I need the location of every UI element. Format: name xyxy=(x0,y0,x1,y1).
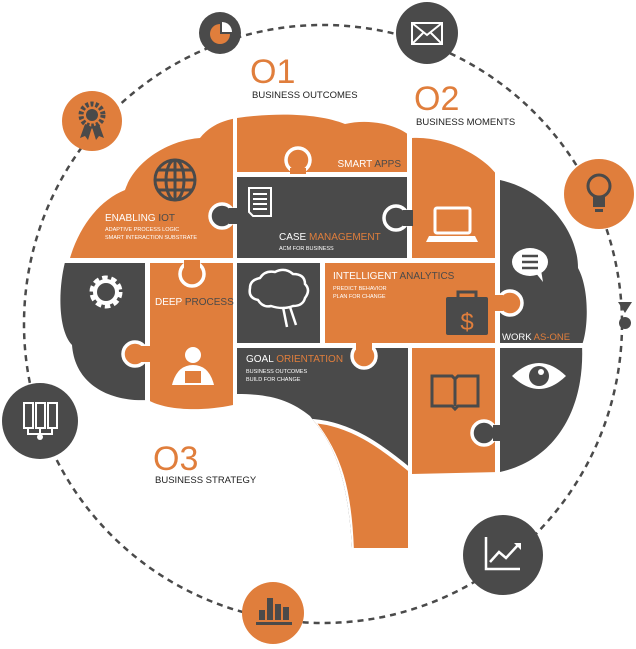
panel: smart apps xyxy=(237,114,407,172)
icon: eye xyxy=(512,363,566,389)
panel: eye xyxy=(500,348,582,472)
heading: 01: BUSINESS OUTCOMES xyxy=(252,90,358,101)
text: intelligent analytics: INTELLIGENT ANALYTICS xyxy=(333,271,455,282)
arrow marker xyxy=(618,302,632,329)
icon: document xyxy=(249,188,271,216)
icon: brain outline xyxy=(250,270,308,327)
icon: pie chart xyxy=(199,12,241,54)
text: goal orientation: BUILD FOR CHANGE xyxy=(246,377,301,383)
icon: gear xyxy=(93,279,119,305)
text: case management: ACM FOR BUSINESS xyxy=(279,246,334,252)
text: intelligent analytics: PLAN FOR CHANGE xyxy=(333,294,386,300)
icon: book xyxy=(432,376,478,409)
panel: book xyxy=(412,348,495,474)
puzzle knobs xyxy=(123,148,522,445)
text: enabling iot: SMART INTERACTION SUBSTRATE xyxy=(105,235,197,241)
text: enabling iot xyxy=(105,213,197,241)
brain xyxy=(60,114,587,548)
icon: light bulb xyxy=(564,159,634,229)
text: deep process: DEEP PROCESS xyxy=(155,297,234,308)
text: goal orientation: GOAL ORIENTATION xyxy=(246,354,343,365)
text: goal orientation: BUSINESS OUTCOMES xyxy=(246,369,307,375)
icon: laptop xyxy=(426,208,478,242)
text: case management: CASE MANAGEMENT xyxy=(279,232,381,243)
heading: 02: O2 xyxy=(414,80,459,118)
text: work as-one: WORK AS-ONE xyxy=(502,332,570,343)
heading: 03 xyxy=(153,440,257,486)
heading: 03: BUSINESS STRATEGY xyxy=(155,475,257,486)
heading: 01 xyxy=(250,53,358,101)
text: goal orientation xyxy=(246,354,343,383)
icon: globe xyxy=(155,160,195,200)
text: smart apps: SMART APPS xyxy=(337,159,401,170)
text: enabling iot: ENABLING IOT xyxy=(105,213,175,224)
icon: reading person xyxy=(172,347,214,385)
panel: work as-one xyxy=(500,180,587,343)
icon: folders xyxy=(2,383,78,459)
text: intelligent analytics xyxy=(333,271,455,300)
panel: goal orientation xyxy=(237,348,408,548)
panel: laptop xyxy=(412,138,495,258)
panel: brain icon xyxy=(237,263,320,343)
panel: enabling iot xyxy=(70,118,233,258)
text: intelligent analytics: PREDICT BEHAVIOR xyxy=(333,286,387,292)
stem xyxy=(313,421,410,552)
icon: briefcase xyxy=(446,292,488,336)
icon: briefcase: $ xyxy=(460,309,474,336)
panel: gear xyxy=(60,263,145,400)
panel: case management xyxy=(237,177,407,258)
panel: intelligent analytics xyxy=(325,263,495,343)
heading: 02: BUSINESS MOMENTS xyxy=(416,117,515,128)
icon: line chart xyxy=(463,515,543,595)
icon: bar chart xyxy=(242,582,304,644)
text: enabling iot: ADAPTIVE PROCESS LOGIC xyxy=(105,227,179,233)
heading: 03: O3 xyxy=(153,440,198,478)
panel: deep process xyxy=(150,263,233,423)
icon: speech bubble xyxy=(512,248,548,282)
icon: award xyxy=(62,91,122,151)
heading: 02 xyxy=(414,80,515,128)
text: case management xyxy=(279,232,381,252)
heading: 01: O1 xyxy=(250,53,295,91)
icon: envelope xyxy=(396,2,458,64)
